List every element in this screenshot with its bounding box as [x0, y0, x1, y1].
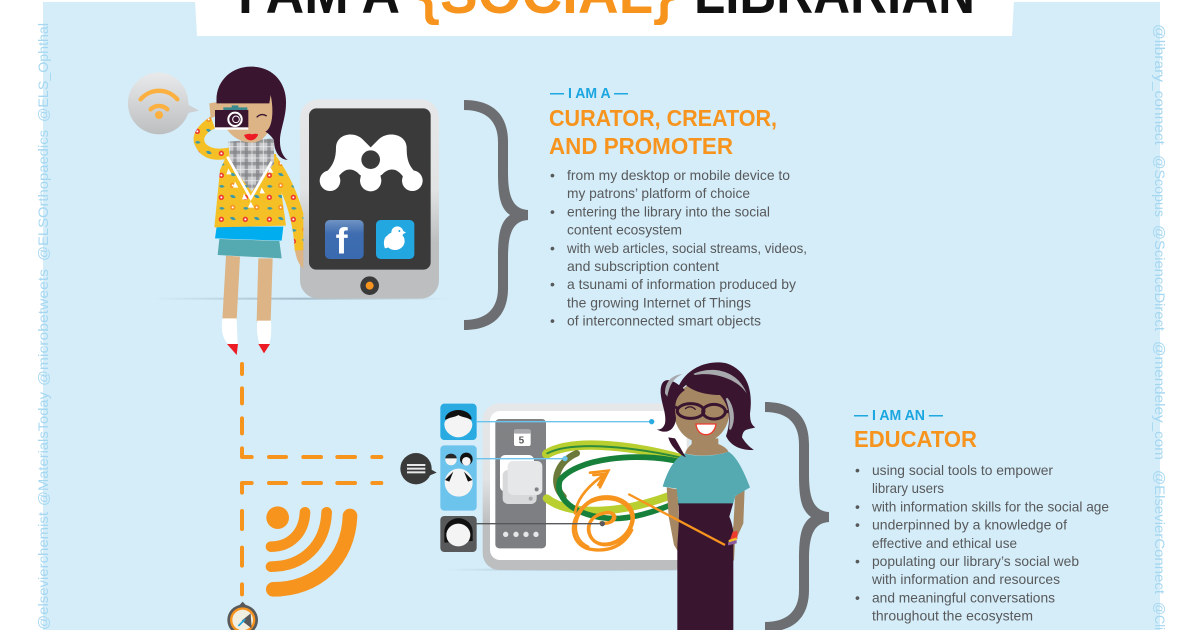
- text block: curator, creator, and promoter: •: [550, 167, 555, 183]
- icon: twitter bird: [384, 226, 406, 250]
- text block: educator: and meaningful conversations: [872, 589, 1055, 605]
- icon: compass: [227, 602, 258, 630]
- text block: educator: library users: [872, 480, 944, 496]
- text block: educator: EDUCATOR: [854, 426, 977, 452]
- text block: curator, creator, and promoter: •: [550, 240, 555, 256]
- text block: curator, creator, and promoter: of interconnected smart objects: [567, 313, 761, 329]
- text block: educator: using social tools to empower: [872, 462, 1053, 478]
- right side twitter handles: @mendeley_com: [1152, 341, 1168, 460]
- text block: educator: •: [855, 553, 860, 569]
- text block: curator, creator, and promoter: entering the library into the social: [567, 203, 770, 219]
- text block: curator, creator, and promoter: content ecosystem: [567, 222, 682, 238]
- text block: educator: with information and resources: [871, 571, 1060, 587]
- left side twitter handles: [35, 23, 51, 630]
- text block: educator: with information skills for the social age: [871, 498, 1109, 514]
- text block: curator, creator, and promoter: a tsunami of information produced by: [567, 276, 796, 292]
- brace: educator section: [765, 402, 829, 630]
- text block: educator: •: [855, 517, 860, 533]
- text block: curator, creator, and promoter: the growing Internet of Things: [567, 294, 751, 310]
- dashed orange connector: [242, 364, 381, 594]
- green swirl: [547, 445, 683, 518]
- figure: woman with camera: [194, 67, 303, 355]
- right side twitter handles: @ElsevierConnect: [1152, 470, 1168, 594]
- text block: educator: •: [855, 498, 860, 514]
- text block: educator: throughout the ecosystem: [872, 608, 1033, 624]
- tablet with Mendeley, Facebook and Twitter: f: [336, 220, 349, 261]
- brace: curator section: [464, 100, 528, 330]
- text block: curator, creator, and promoter: •: [550, 276, 555, 292]
- right side twitter handles: @ScienceDirect: [1152, 225, 1168, 331]
- left side twitter handles: @microbetweets: [35, 269, 51, 386]
- whiteboard tablet: [483, 403, 689, 570]
- left side twitter handles: @ELS_Ophthal: [35, 23, 51, 122]
- text block: curator, creator, and promoter: [549, 85, 807, 329]
- illustration: curator librarian with tablet: [128, 67, 450, 355]
- whiteboard tablet: 5: [519, 436, 525, 447]
- text block: educator: underpinned by a knowledge of: [872, 517, 1067, 533]
- right side twitter handles: @library_connect: [1152, 24, 1168, 145]
- right side twitter handles: @Scopus: [1152, 155, 1168, 217]
- text block: educator: [854, 407, 1109, 624]
- icon: wifi speech bubble: [128, 72, 199, 134]
- icon: RSS: [266, 506, 350, 589]
- text block: curator, creator, and promoter: •: [550, 313, 555, 329]
- text block: educator: populating our library’s social web: [872, 553, 1079, 569]
- text block: curator, creator, and promoter: CURATOR, CREATOR,: [549, 105, 777, 131]
- text block: educator: •: [855, 589, 860, 605]
- left side twitter handles: @MaterialsToday: [35, 392, 51, 506]
- text block: curator, creator, and promoter: with web articles, social streams, videos,: [566, 240, 807, 256]
- text block: educator: •: [855, 462, 860, 478]
- text block: educator: — I AM AN —: [854, 407, 943, 424]
- right side twitter handles: [1152, 24, 1168, 630]
- text block: curator, creator, and promoter: — I AM A —: [550, 85, 628, 102]
- text block: curator, creator, and promoter: and subscription content: [567, 258, 719, 274]
- text block: educator: effective and ethical use: [872, 535, 1017, 551]
- icon: menu speech bubble: [400, 453, 437, 484]
- text block: curator, creator, and promoter: my patrons’ platform of choice: [567, 185, 750, 201]
- connector: dashed path, RSS icon and compass: [227, 364, 381, 630]
- orange scribble arrow: [573, 471, 633, 550]
- illustration: educator with whiteboard: [400, 362, 755, 630]
- text block: curator, creator, and promoter: •: [550, 203, 555, 219]
- text block: curator, creator, and promoter: from my desktop or mobile device to: [567, 167, 790, 183]
- text block: curator, creator, and promoter: AND PROMOTER: [549, 133, 733, 159]
- left side twitter handles: @ELSOrthopaedics: [35, 130, 51, 261]
- figure: teacher with pointer: [628, 362, 755, 630]
- title banner: [195, 0, 1014, 36]
- left side twitter handles: @elsevierchemist: [35, 512, 51, 630]
- user tiles and connector lines: [440, 404, 654, 552]
- tablet with Mendeley, Facebook and Twitter: [300, 99, 439, 299]
